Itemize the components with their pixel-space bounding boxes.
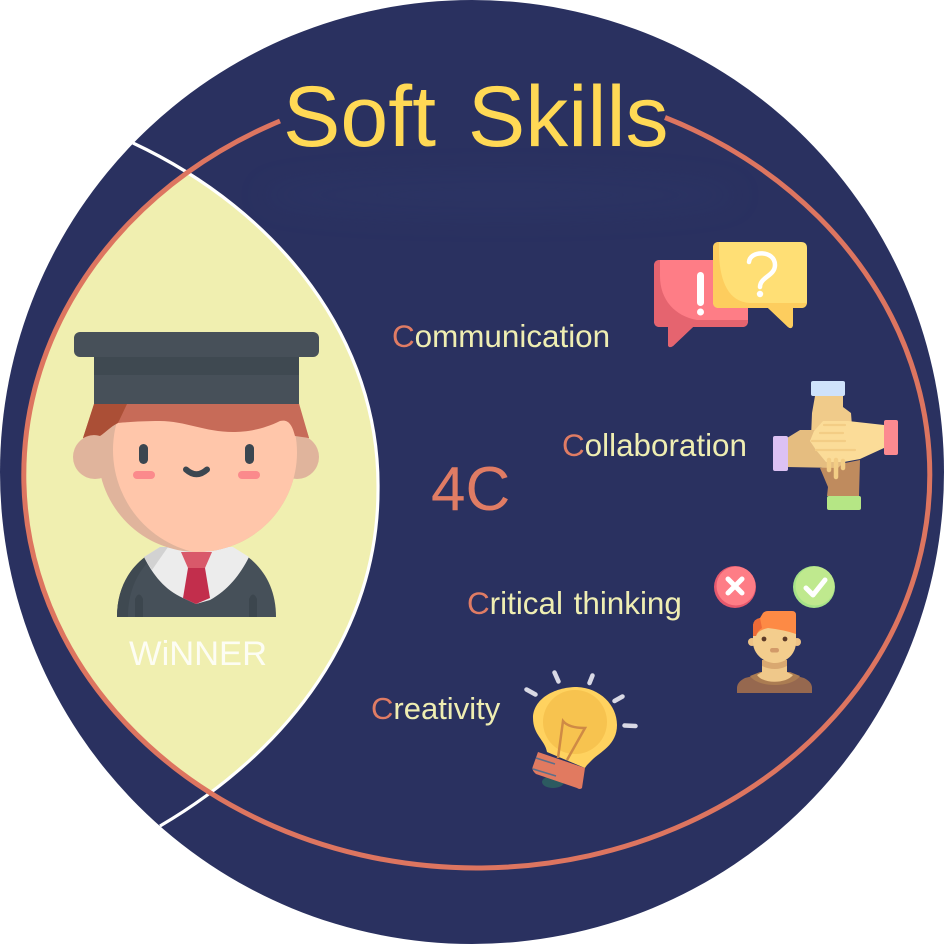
cuffs xyxy=(811,381,845,396)
icon: wrong mark xyxy=(714,566,756,608)
hat xyxy=(94,350,299,404)
faint glow under title xyxy=(260,175,740,215)
icon: speech bubbles xyxy=(654,242,807,347)
fingers xyxy=(829,460,843,477)
neck xyxy=(757,660,793,682)
smile xyxy=(186,470,207,474)
filament xyxy=(558,721,585,760)
cheeks xyxy=(133,471,155,479)
hair back xyxy=(83,404,309,445)
eyes xyxy=(139,444,148,464)
ears xyxy=(73,435,117,479)
exclamation mark xyxy=(697,272,704,306)
shirt xyxy=(737,675,812,693)
red bubble xyxy=(654,260,748,347)
icon: light bulb xyxy=(526,672,636,789)
label: creativity: Creativity xyxy=(371,691,501,726)
label: winner: WiNNER xyxy=(129,635,267,673)
face xyxy=(98,353,297,552)
hair front xyxy=(118,400,309,438)
bottom arm xyxy=(820,460,860,496)
label: communication: Communication xyxy=(392,319,610,354)
lens white outline xyxy=(133,143,378,826)
head xyxy=(753,625,796,663)
icon: correct mark xyxy=(793,566,835,608)
collar and tie xyxy=(144,547,249,604)
winner lens panel xyxy=(26,175,376,790)
icon: stacked hands xyxy=(773,381,898,510)
gown xyxy=(117,557,276,617)
yellow bubble xyxy=(713,242,807,328)
central label: 4C: 4C xyxy=(431,455,510,524)
left arm xyxy=(787,430,844,468)
icon: thinking person xyxy=(737,611,812,693)
orange ring xyxy=(24,118,930,868)
label: critical thinking: Critical thinking xyxy=(467,586,682,621)
title: Soft Skills xyxy=(283,69,669,165)
bulb base xyxy=(542,776,564,788)
hair xyxy=(753,611,796,636)
ears xyxy=(748,638,756,646)
question mark xyxy=(749,253,775,287)
bulb glass xyxy=(533,687,617,768)
rays xyxy=(526,672,636,726)
top arm xyxy=(811,396,852,438)
right arm xyxy=(810,421,884,462)
icon: graduate character xyxy=(73,332,323,617)
facial features xyxy=(762,637,766,641)
label: collaboration: Collaboration xyxy=(562,428,747,463)
